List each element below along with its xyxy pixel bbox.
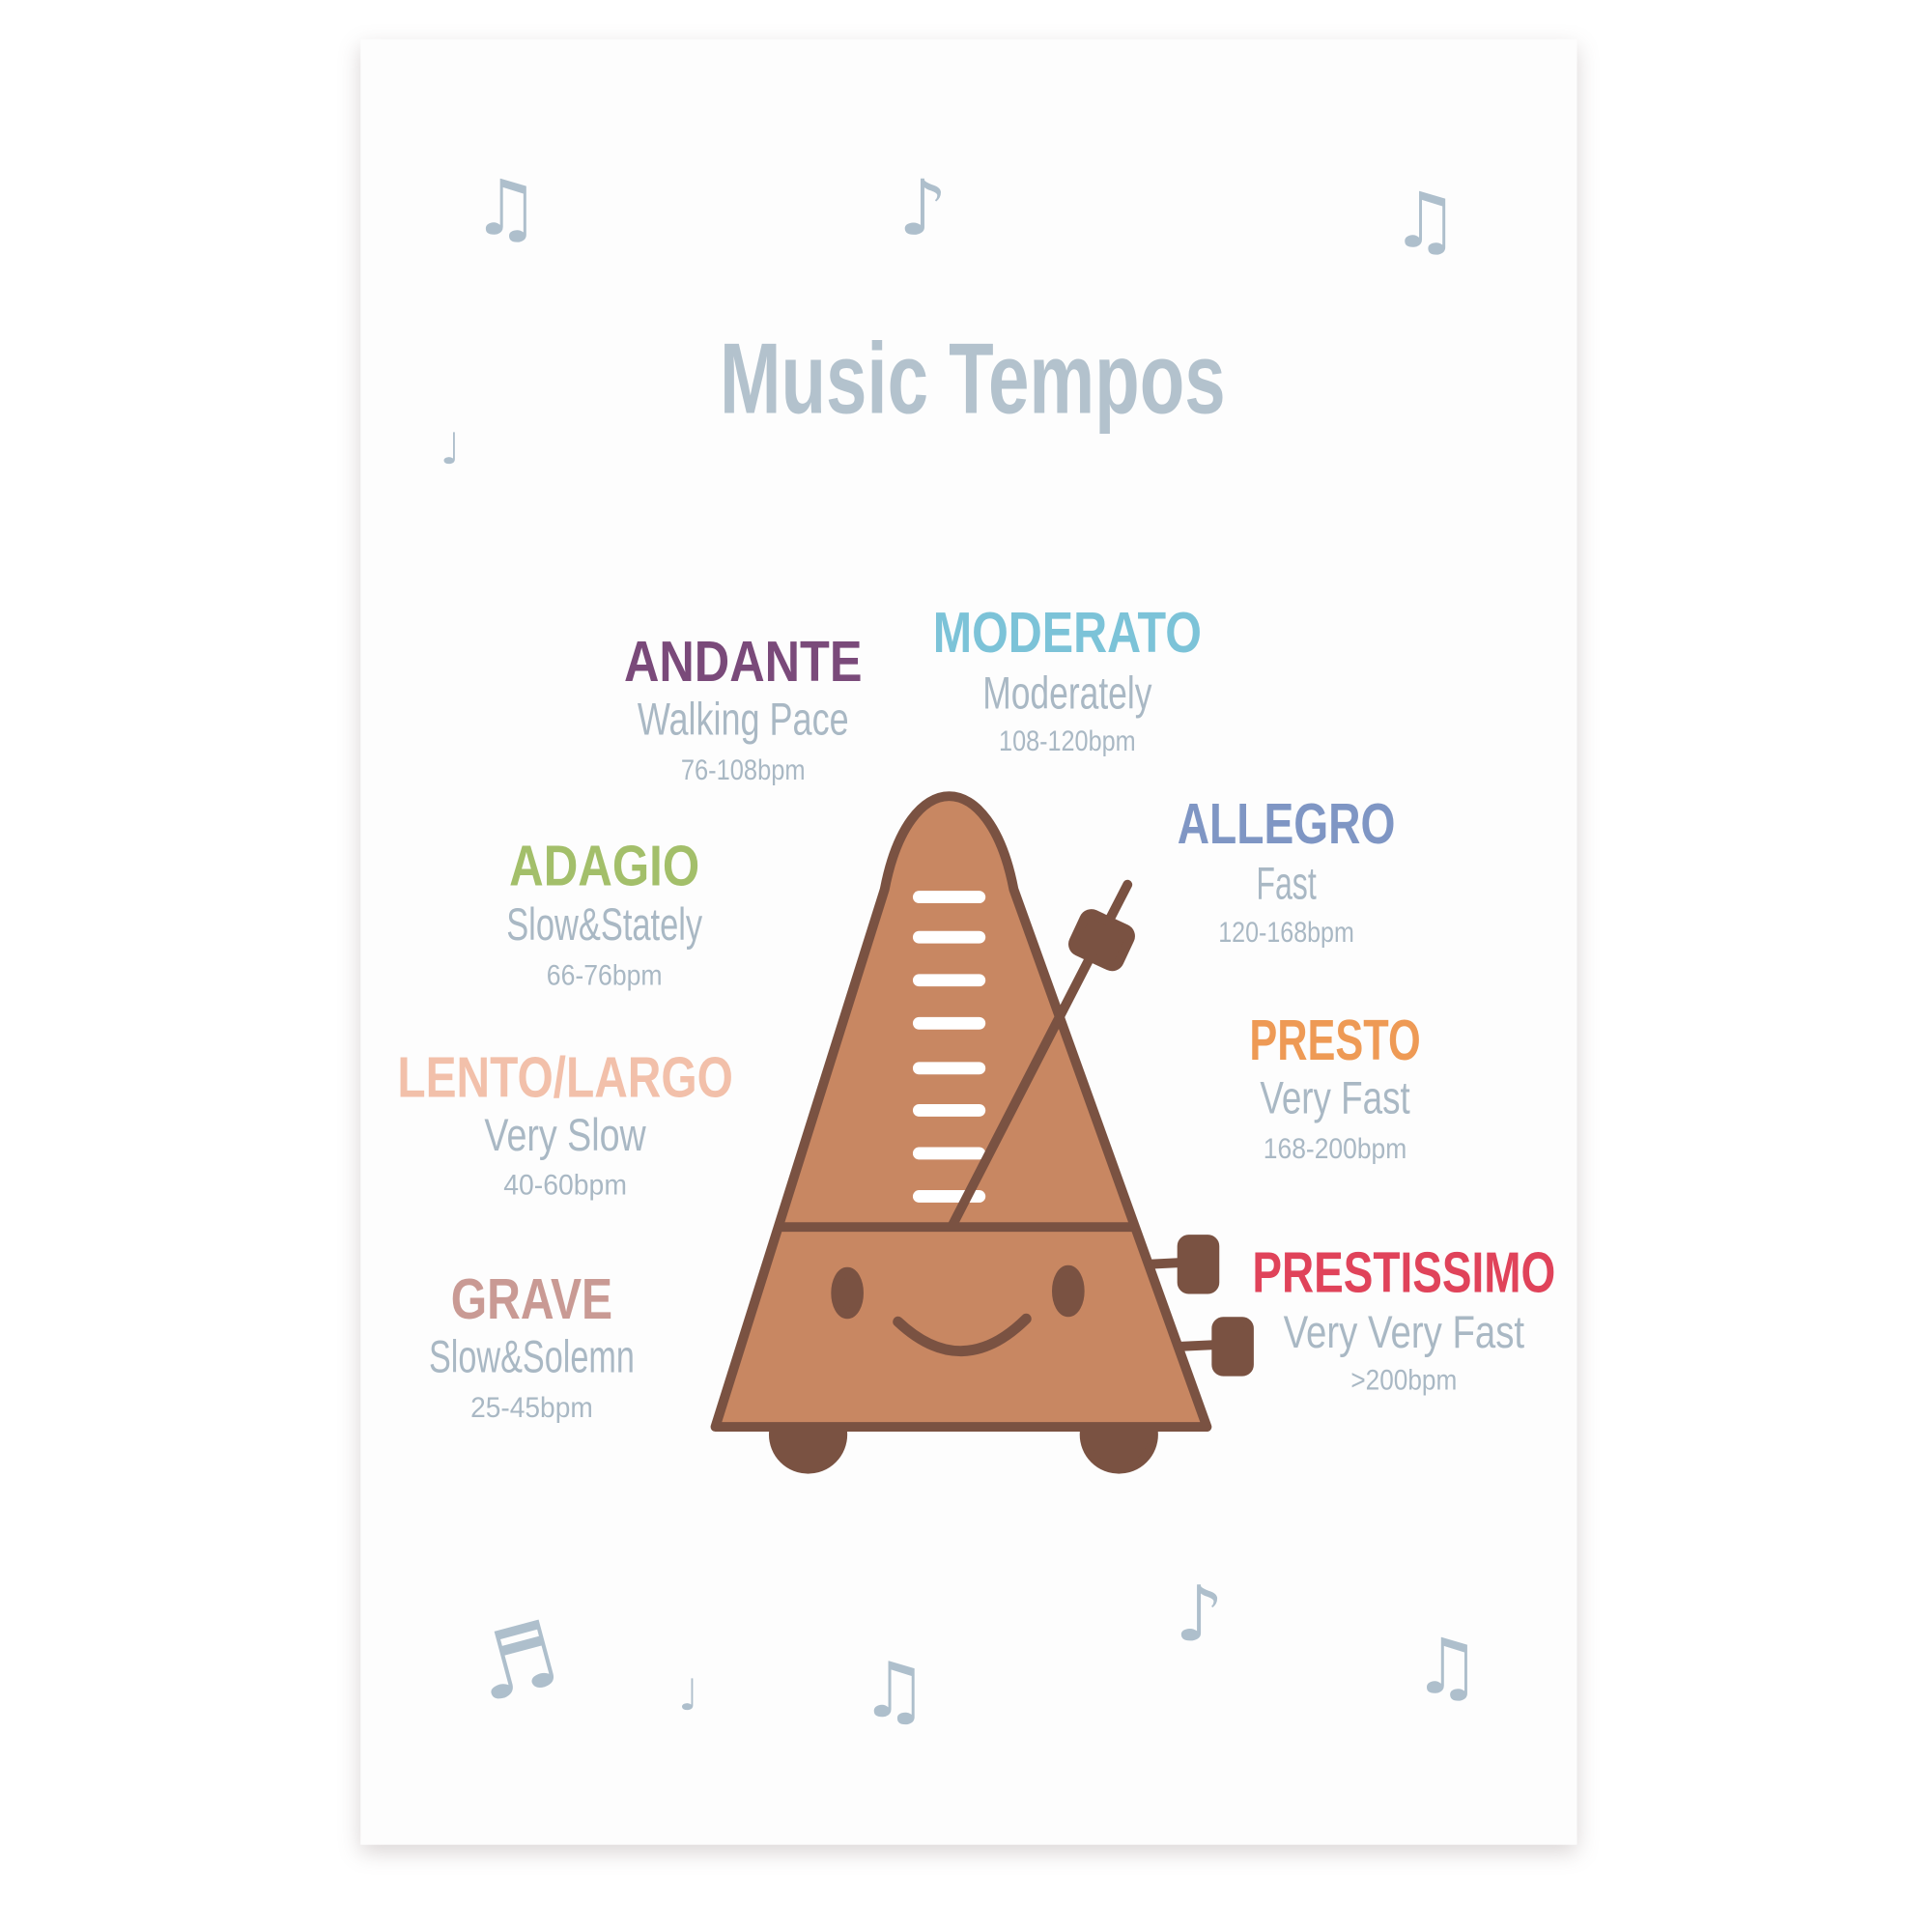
body: [716, 796, 1207, 1427]
text: Walking Pace: [638, 694, 849, 745]
decorative music notes: ♬: [464, 1601, 570, 1724]
text: 25-45bpm: [470, 1392, 593, 1424]
feet: [774, 1400, 842, 1469]
labels: ANDANTE: [624, 629, 862, 694]
title: Music Tempos: [720, 324, 1226, 436]
decorative music notes: ♩: [678, 1670, 698, 1720]
text: 40-60bpm: [503, 1170, 627, 1202]
decorative music notes: [440, 163, 1481, 1735]
text: 108-120bpm: [999, 725, 1136, 757]
decorative music notes: ♫: [1391, 175, 1460, 265]
labels: ADAGIO: [509, 834, 699, 898]
scale marks: [919, 897, 980, 1196]
labels: ALLEGRO: [1178, 791, 1395, 856]
text: Slow&Stately: [506, 899, 702, 951]
text: Moderately: [982, 668, 1152, 720]
decorative music notes: ♫: [471, 163, 540, 253]
text: 76-108bpm: [681, 754, 806, 786]
labels: [397, 600, 1555, 1331]
pendulum: [952, 885, 1127, 1225]
labels: MODERATO: [933, 600, 1202, 665]
metronome: [716, 796, 1249, 1469]
labels: PRESTO: [1249, 1008, 1421, 1072]
labels: PRESTISSIMO: [1252, 1239, 1555, 1304]
text: Fast: [1256, 859, 1317, 910]
text: Slow&Solemn: [429, 1332, 635, 1383]
text: 120-168bpm: [1218, 917, 1354, 949]
labels: GRAVE: [451, 1266, 612, 1331]
text: Very Very Fast: [1284, 1307, 1524, 1358]
text: Very Slow: [484, 1110, 646, 1161]
decorative music notes: ♪: [1175, 1569, 1224, 1659]
text: Very Fast: [1260, 1072, 1410, 1123]
decorative music notes: ♩: [440, 424, 461, 474]
labels: LENTO/LARGO: [397, 1045, 733, 1110]
text: >200bpm: [1350, 1364, 1457, 1396]
decorative music notes: ♪: [898, 163, 948, 253]
knobs: [1148, 1263, 1186, 1264]
text: 66-76bpm: [547, 960, 663, 992]
decorative music notes: ♫: [860, 1645, 928, 1735]
decorative music notes: ♫: [1412, 1621, 1481, 1711]
face: [836, 1272, 859, 1314]
poster card: [360, 40, 1577, 1845]
text: 168-200bpm: [1264, 1133, 1406, 1165]
